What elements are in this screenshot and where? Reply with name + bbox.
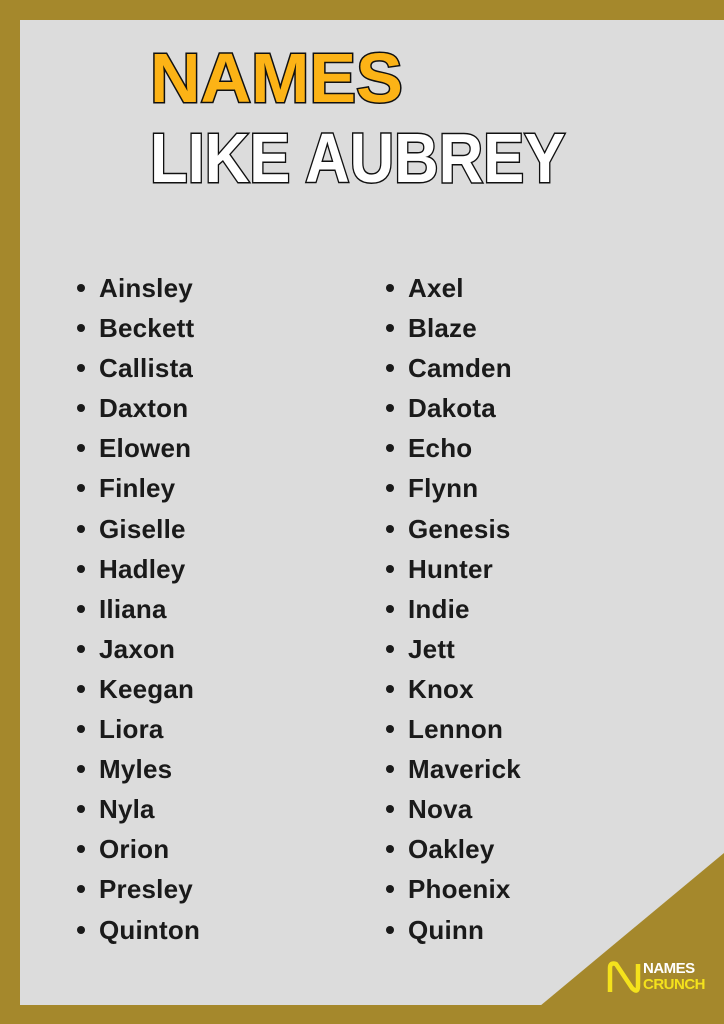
logo text	[643, 960, 705, 993]
list: left column: Finley	[99, 473, 175, 503]
title line 2: LIKE AUBREY	[150, 119, 565, 197]
list: left column: Keegan	[99, 674, 194, 704]
list: right column: Quinn	[408, 914, 484, 944]
list: right column: Hunter	[408, 554, 493, 584]
list: right column: Nova	[408, 794, 472, 824]
icon: N logo	[608, 961, 640, 993]
logo text: NAMES	[643, 960, 695, 977]
list: left column: Myles	[99, 754, 172, 784]
list: right column: Axel	[408, 273, 464, 303]
list: left column: Liora	[99, 714, 164, 744]
list: right column: Jett	[408, 634, 455, 664]
list: right column: Knox	[408, 674, 474, 704]
list: right column: Camden	[408, 353, 512, 383]
list: left column: Quinton	[99, 914, 200, 944]
list: right column: Genesis	[408, 514, 511, 544]
logo text: CRUNCH	[643, 976, 705, 993]
list: left column: Elowen	[99, 433, 191, 463]
list: right column: Indie	[408, 594, 470, 624]
logo	[608, 960, 705, 993]
list: left column: Jaxon	[99, 634, 175, 664]
list: right column: Lennon	[408, 714, 503, 744]
list: right column: Phoenix	[408, 874, 511, 904]
list: left column: Iliana	[99, 594, 167, 624]
list: left column: Beckett	[99, 313, 194, 343]
list: left column: Presley	[99, 874, 193, 904]
list: right column: Maverick	[408, 754, 521, 784]
list: right column: Dakota	[408, 393, 496, 423]
list: left column: Daxton	[99, 393, 188, 423]
title line 1: NAMES	[150, 39, 403, 117]
list: right column: Flynn	[408, 473, 478, 503]
list: left column: Orion	[99, 834, 169, 864]
list: left column: Hadley	[99, 554, 185, 584]
list: right column	[386, 273, 521, 944]
list: right column: Oakley	[408, 834, 494, 864]
list: left column: Giselle	[99, 514, 186, 544]
title	[150, 39, 566, 197]
list: right column: Blaze	[408, 313, 477, 343]
list: right column: Echo	[408, 433, 472, 463]
list: left column	[77, 273, 200, 944]
list: left column: Nyla	[99, 794, 155, 824]
list: left column: Callista	[99, 353, 193, 383]
list: left column: Ainsley	[99, 273, 193, 303]
